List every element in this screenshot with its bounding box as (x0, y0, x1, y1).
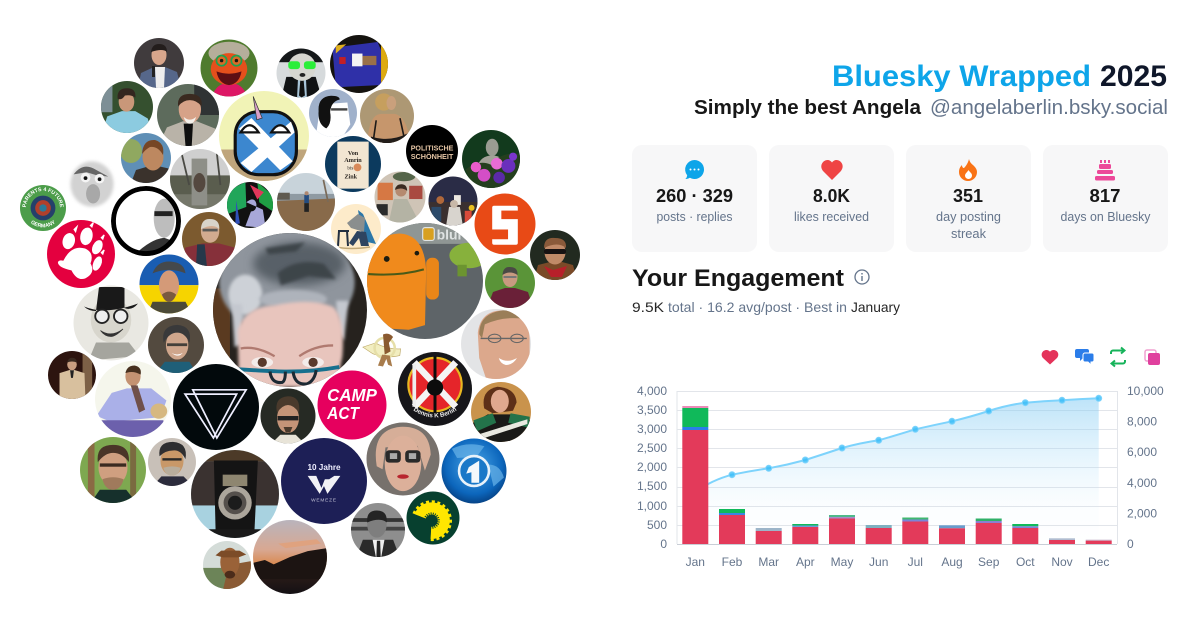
right axis labels: 10,000 (1127, 384, 1164, 398)
chart legend icons (1042, 348, 1160, 366)
avatar: Dennis K Berlin logo: Dennis K Berlin (414, 408, 456, 418)
icon: likes heart (1042, 350, 1058, 364)
month labels: May (831, 555, 853, 569)
engagement summary: January (851, 299, 900, 315)
avatar: grinning man in beige jacket (157, 84, 219, 146)
stat: posts and replies count: 260 · 329 (656, 186, 733, 206)
avatar: man with cap on Ukrainian colours (140, 254, 198, 314)
avatar: white paw on red (47, 220, 115, 288)
month labels: Aug (941, 555, 963, 569)
stat label: days on Bluesky (1060, 209, 1151, 224)
stat label: posts · replies (656, 209, 733, 224)
subtitle: display name and handle: Simply the best Angela (694, 97, 922, 119)
avatar: highland cow (203, 541, 251, 589)
avatar: grey muppet sketch (69, 160, 115, 208)
avatar: Parents 4 Future Germany badge: GERMANY (31, 220, 54, 228)
avatar: dog in suit with green sunglasses (276, 48, 326, 98)
right axis labels: 2,000 (1127, 506, 1157, 520)
avatar: Parents 4 Future Germany badge: PARENTS 4 FUTURE (22, 187, 64, 208)
line markers (729, 395, 1102, 478)
left axis labels: 1,000 (637, 499, 667, 513)
engagement summary: total · 16.2 avg/post · Best in (668, 299, 847, 315)
month labels: Apr (796, 555, 815, 569)
avatar: Buddha statue with purple flowers (462, 130, 520, 188)
month labels: Sep (978, 555, 1000, 569)
right axis labels: 4,000 (1127, 476, 1157, 490)
panel: day posting streak (906, 145, 1031, 252)
left axis labels: 3,500 (637, 403, 667, 417)
avatar: woman with mirrored sunglasses (366, 422, 440, 496)
avatar: orange Android figure (367, 223, 489, 339)
bars: August (939, 525, 965, 544)
title: 2025 (1100, 60, 1167, 93)
bars: March (756, 528, 782, 544)
avatar: woman in grey suit in office (374, 172, 426, 222)
avatar: black ring with line portrait (111, 186, 181, 256)
avatar: Tagesschau ARD globe (442, 438, 506, 504)
left axis labels: 500 (647, 518, 667, 532)
month labels: Jan (686, 555, 705, 569)
bars: May (829, 515, 855, 544)
left axis labels: 2,500 (637, 441, 667, 455)
avatar: bearded man, painted style (148, 438, 196, 486)
avatar: Berlin wall segment (170, 149, 230, 209)
icon: quotes squares (1145, 350, 1160, 365)
right axis labels: 0 (1127, 537, 1134, 551)
avatar: man standing by a lake (277, 173, 335, 231)
avatar: bright smiling man with glasses (461, 309, 531, 379)
avatar: orange Android figure: blur (437, 226, 463, 242)
month labels: Jul (908, 555, 923, 569)
bars: November (1049, 538, 1075, 544)
axis baseline (677, 544, 1117, 546)
bars: June (866, 525, 892, 544)
cumulative area (695, 398, 1099, 544)
left axis labels: 4,000 (637, 384, 667, 398)
avatar: smiling woman on wooden floor (471, 382, 531, 442)
month labels: Oct (1016, 555, 1035, 569)
bars: September (976, 518, 1002, 544)
subtitle: display name and handle (694, 97, 1168, 119)
icon: info (855, 270, 869, 284)
avatar: woman seen from behind (360, 89, 414, 143)
avatar: Dennis K Berlin logo (398, 352, 472, 426)
avatar: Batman with walker (331, 204, 381, 254)
stat: streak days: 351 (953, 186, 983, 206)
right axis labels: 6,000 (1127, 445, 1157, 459)
avatar: book cover (325, 136, 381, 192)
icon: reposts arrows (1111, 348, 1125, 366)
avatar: book cover: Von (348, 151, 359, 157)
engagement summary (632, 299, 900, 315)
avatar: smiling man with glasses and curly hair (148, 317, 204, 373)
title: Bluesky Wrapped (832, 60, 1091, 93)
avatar: Politische Schoenheit logo: SCHÖNHEIT (411, 152, 454, 161)
avatar: Wemeze ten years logo (281, 438, 367, 524)
heading: Your Engagement: Your Engagement (632, 265, 844, 292)
avatar: black and white man in suit (351, 503, 405, 557)
month labels (686, 555, 1109, 569)
icon: heart (821, 160, 843, 180)
avatar: Camp Act logo: ACT (326, 403, 360, 423)
icon: chat bubble (685, 160, 704, 179)
avatar: man with glasses in forest (80, 437, 146, 503)
panel: days on Bluesky (1043, 145, 1168, 252)
bars: February (719, 509, 745, 544)
avatar: sunset landscape (253, 520, 327, 594)
avatar: Greens sunflower (406, 492, 460, 544)
left axis labels: 0 (660, 537, 667, 551)
stat label: likes received (794, 209, 869, 224)
avatar: Politische Schoenheit logo (406, 125, 458, 177)
avatar: man in maroon shirt in garden (485, 258, 535, 308)
avatar: book cover: Zink (344, 175, 358, 181)
avatar: older man in red shirt (182, 212, 236, 266)
bars: December (1086, 540, 1112, 544)
panel: likes received (769, 145, 894, 252)
bars: July (902, 518, 928, 544)
avatar: man with map background (120, 133, 171, 183)
left axis labels: 1,500 (637, 479, 667, 493)
bars: January (682, 406, 708, 544)
avatar: book cover: bis (347, 166, 353, 172)
avatar: older man in sunglasses and red scarf (530, 230, 580, 280)
avatar: vintage folding camera (191, 450, 279, 538)
engagement summary: 9.5K (632, 299, 665, 315)
avatar: young man in light blue shirt (101, 81, 153, 133)
chart: monthly engagement stacked bars with cumulative line (637, 384, 1164, 569)
avatar cluster (20, 35, 580, 594)
stat label: day posting (936, 209, 1001, 224)
avatar: line art man with glasses (309, 89, 357, 137)
avatar: Scottish flag countryball with unicorn horn (219, 91, 309, 181)
left axis labels: 2,000 (637, 460, 667, 474)
avatar: orange S logo (474, 194, 536, 254)
stat: days count: 817 (1090, 186, 1120, 206)
avatar: Wemeze ten years logo: 10 Jahre (307, 463, 341, 472)
month labels: Mar (758, 555, 779, 569)
avatar: book cover: Amrin (344, 158, 362, 164)
avatar: Politische Schoenheit logo: POLITISCHE (411, 145, 454, 152)
avatar: cartoon man in bowler hat (74, 286, 148, 360)
left axis labels (637, 384, 667, 551)
bars: April (792, 524, 818, 544)
avatar: post horn with little figure (363, 334, 401, 366)
avatar: orange muppet with green glasses (200, 40, 258, 96)
month labels: Feb (722, 555, 743, 569)
icon: flame (959, 159, 977, 181)
month labels: Jun (869, 555, 888, 569)
avatar: Parents 4 Future Germany badge (20, 185, 66, 231)
month labels: Nov (1051, 555, 1073, 569)
bars: October (1012, 524, 1038, 544)
avatar: blue chocolate bar package (330, 35, 388, 93)
avatar: black circle with double white triangle (173, 364, 259, 450)
icon: birthday cake (1095, 160, 1115, 180)
avatar: man in suit with microphone (134, 38, 184, 88)
avatar: man in beige trench coat (48, 351, 96, 399)
avatar: Camp Act logo: CAMP (327, 385, 377, 405)
grid lines (677, 391, 1118, 544)
stat label second line: streak (951, 226, 986, 241)
icon: replies bubbles (1075, 349, 1094, 365)
avatar: largest, woman with silver hair and blue glasses (213, 230, 367, 387)
panel: posts and replies (632, 145, 757, 252)
avatar: Camp Act logo (318, 370, 386, 440)
avatar: night street demonstration (428, 176, 478, 226)
avatar: man lounging in lavender shirt (95, 361, 171, 437)
month labels: Dec (1088, 555, 1109, 569)
right axis labels: 8,000 (1127, 415, 1157, 429)
avatar: Wemeze ten years logo: WEMEZE (311, 498, 337, 504)
avatar: colourful punk illustration (227, 182, 273, 228)
right axis labels (1127, 384, 1164, 551)
avatar: man with glasses and goatee (260, 388, 316, 444)
left axis labels: 3,000 (637, 422, 667, 436)
cumulative line (695, 398, 1099, 492)
subtitle: display name and handle: @angelaberlin.bsky.social (930, 97, 1168, 119)
stat: likes count: 8.0K (813, 186, 850, 206)
